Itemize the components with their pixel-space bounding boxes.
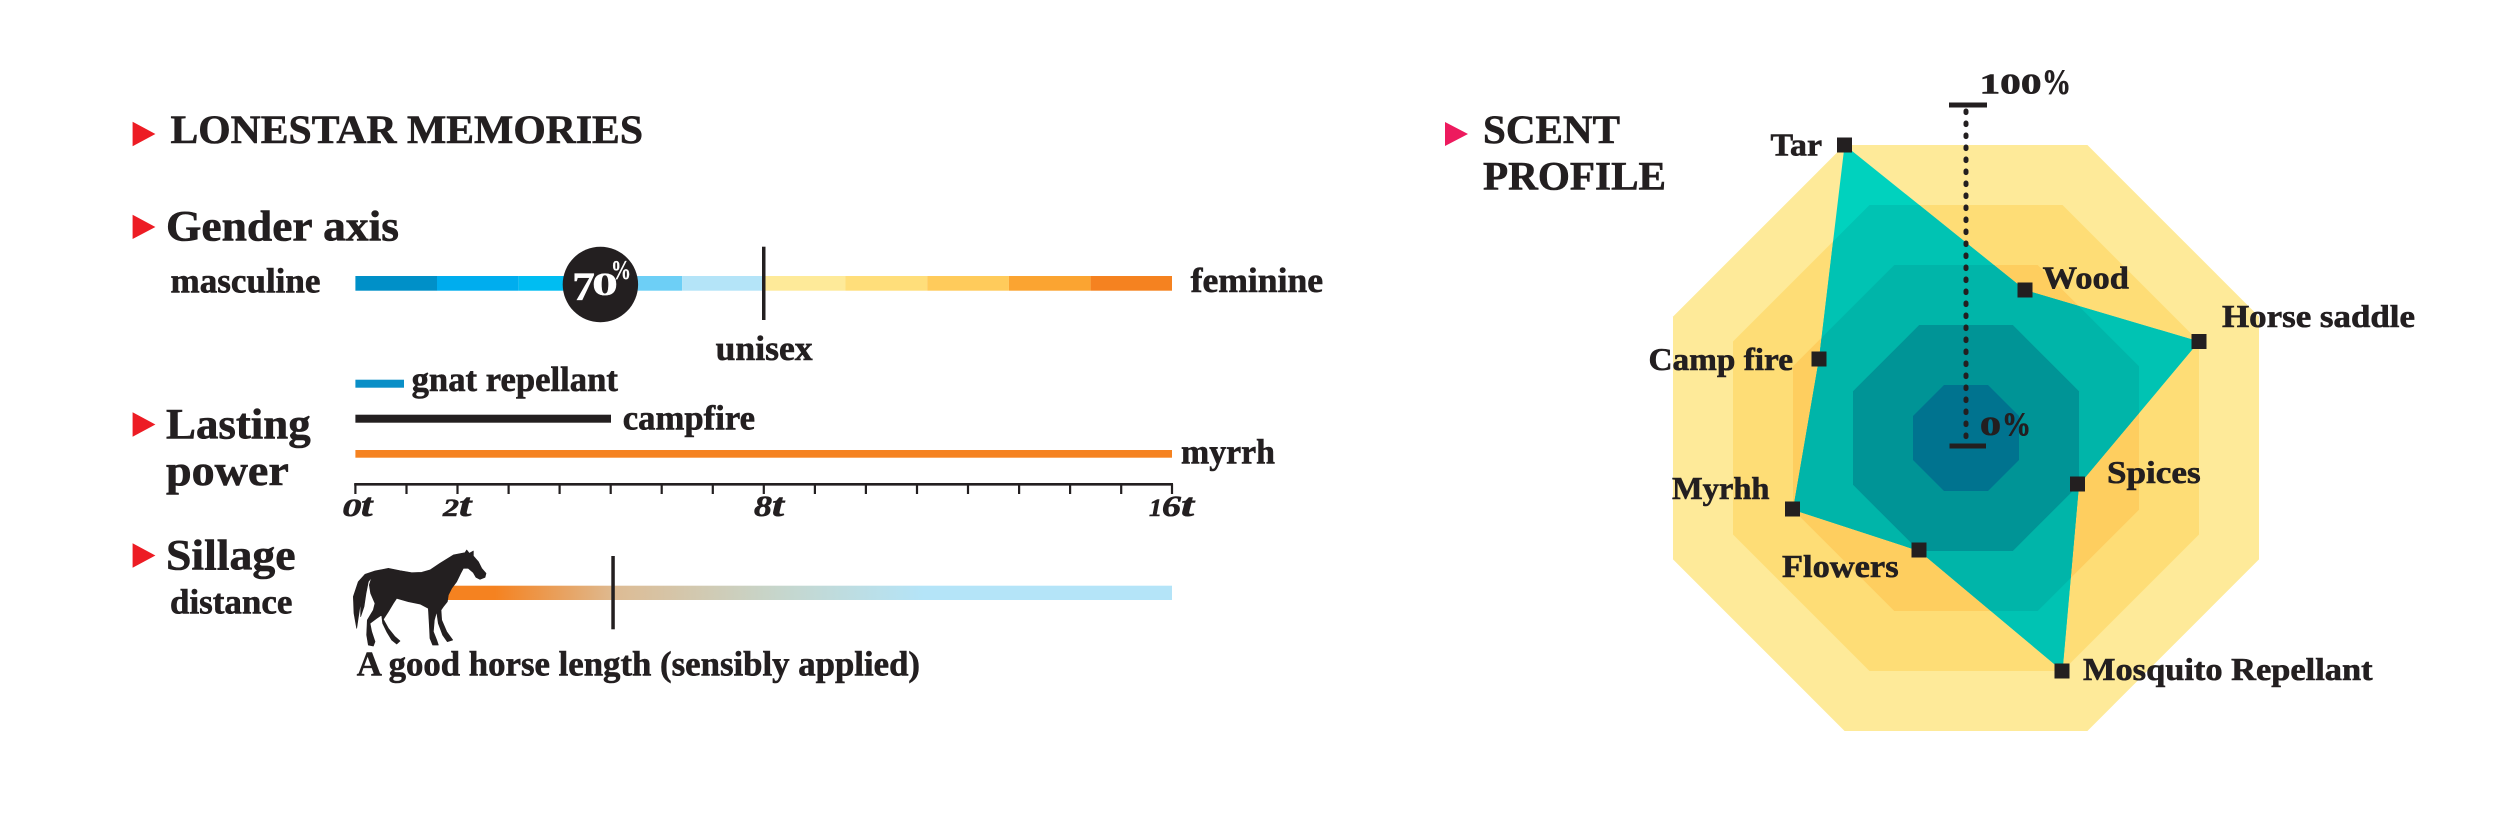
marker: 70 percent: 7 [572, 264, 595, 309]
data point: wood [2018, 260, 2129, 298]
sillage gradient bar [444, 586, 1172, 600]
label: gnat repellant: gnat repellant [412, 360, 618, 399]
marker: 70 percent: 0 [592, 267, 618, 303]
bar: myrrh [355, 450, 1172, 458]
time axis: 1 [1149, 495, 1162, 522]
time axis: 6 [1162, 490, 1181, 523]
panel: lonestar memories [133, 107, 1323, 683]
label: 0 percent [1980, 406, 2031, 444]
time axis: t [772, 488, 785, 524]
label: 0 percent: % [2002, 406, 2031, 444]
data point: spices: Spices [2107, 454, 2201, 490]
horse length tick [611, 556, 615, 629]
heading: lasting power: power [166, 448, 289, 495]
marker: 70 percent: % [611, 255, 631, 285]
icon: horse [353, 550, 486, 646]
data point: myrhh [1672, 470, 1800, 516]
time axis: 2 [442, 495, 459, 522]
title: LONESTAR MEMORIES [170, 107, 643, 152]
heading: gender axis: Gender axis [166, 204, 399, 250]
data point: flowers: Flowers [1782, 548, 1899, 584]
bar: campfire [355, 415, 611, 423]
heading: scent profile: PROFILE [1483, 154, 1666, 199]
time axis: t [361, 488, 374, 524]
label: 100 percent [1980, 62, 2071, 102]
data point: wood: Wood [2043, 260, 2129, 296]
panel: scent profile [1445, 62, 2415, 731]
caption: horse length: A good horse length (sensibly applied) [357, 644, 920, 684]
panel: sillage [133, 532, 1172, 684]
radar rings [1673, 145, 2259, 731]
heading: lasting power: Lasting [166, 402, 311, 448]
heading: scent profile [1445, 107, 1666, 199]
label: myrrh: myrrh [1181, 432, 1275, 472]
panel: lasting power [133, 360, 1275, 524]
label: 100 percent: 100 [1980, 68, 2042, 100]
time axis: t [1181, 488, 1195, 524]
data point: horse saddle: Horse saddle [2222, 298, 2415, 334]
label: feminine: feminine [1191, 261, 1323, 300]
label: distance: distance [170, 582, 292, 622]
data point: camp fire: Camp fire [1648, 341, 1793, 377]
time axis: t [459, 488, 473, 524]
axis: 0 to 100 percent [1949, 105, 1987, 446]
scent polygon [1794, 151, 2193, 664]
label: 0 percent: 0 [1980, 412, 2001, 441]
gender scale bar [355, 276, 1172, 291]
panel: gender axis [133, 204, 1323, 368]
unisex tick [762, 247, 766, 320]
time axis: 8 [754, 490, 772, 523]
data point: tar [1770, 126, 1852, 162]
data point: horse saddle [2192, 298, 2415, 349]
marker: 70 percent [563, 247, 638, 322]
data point: spices [2070, 454, 2201, 492]
time axis: 0 [342, 495, 362, 522]
radar chart [1648, 62, 2415, 731]
time axis [342, 484, 1195, 524]
data point: mosquito repellant: Mosquito Repellant [2083, 651, 2373, 687]
data point: tar: Tar [1770, 126, 1822, 162]
label: 100 percent: % [2042, 62, 2071, 102]
heading: sillage: Sillage [166, 532, 296, 580]
heading: lasting power [133, 402, 311, 495]
label: campfire: campfire [623, 398, 755, 438]
label: unisex: unisex [716, 329, 813, 368]
data point: myrhh: Myrhh [1672, 470, 1770, 506]
heading: scent profile: SCENT [1483, 107, 1620, 152]
label: masculine: masculine [170, 262, 320, 300]
bar: gnat repellant [355, 380, 404, 388]
data point: flowers [1782, 542, 1926, 584]
